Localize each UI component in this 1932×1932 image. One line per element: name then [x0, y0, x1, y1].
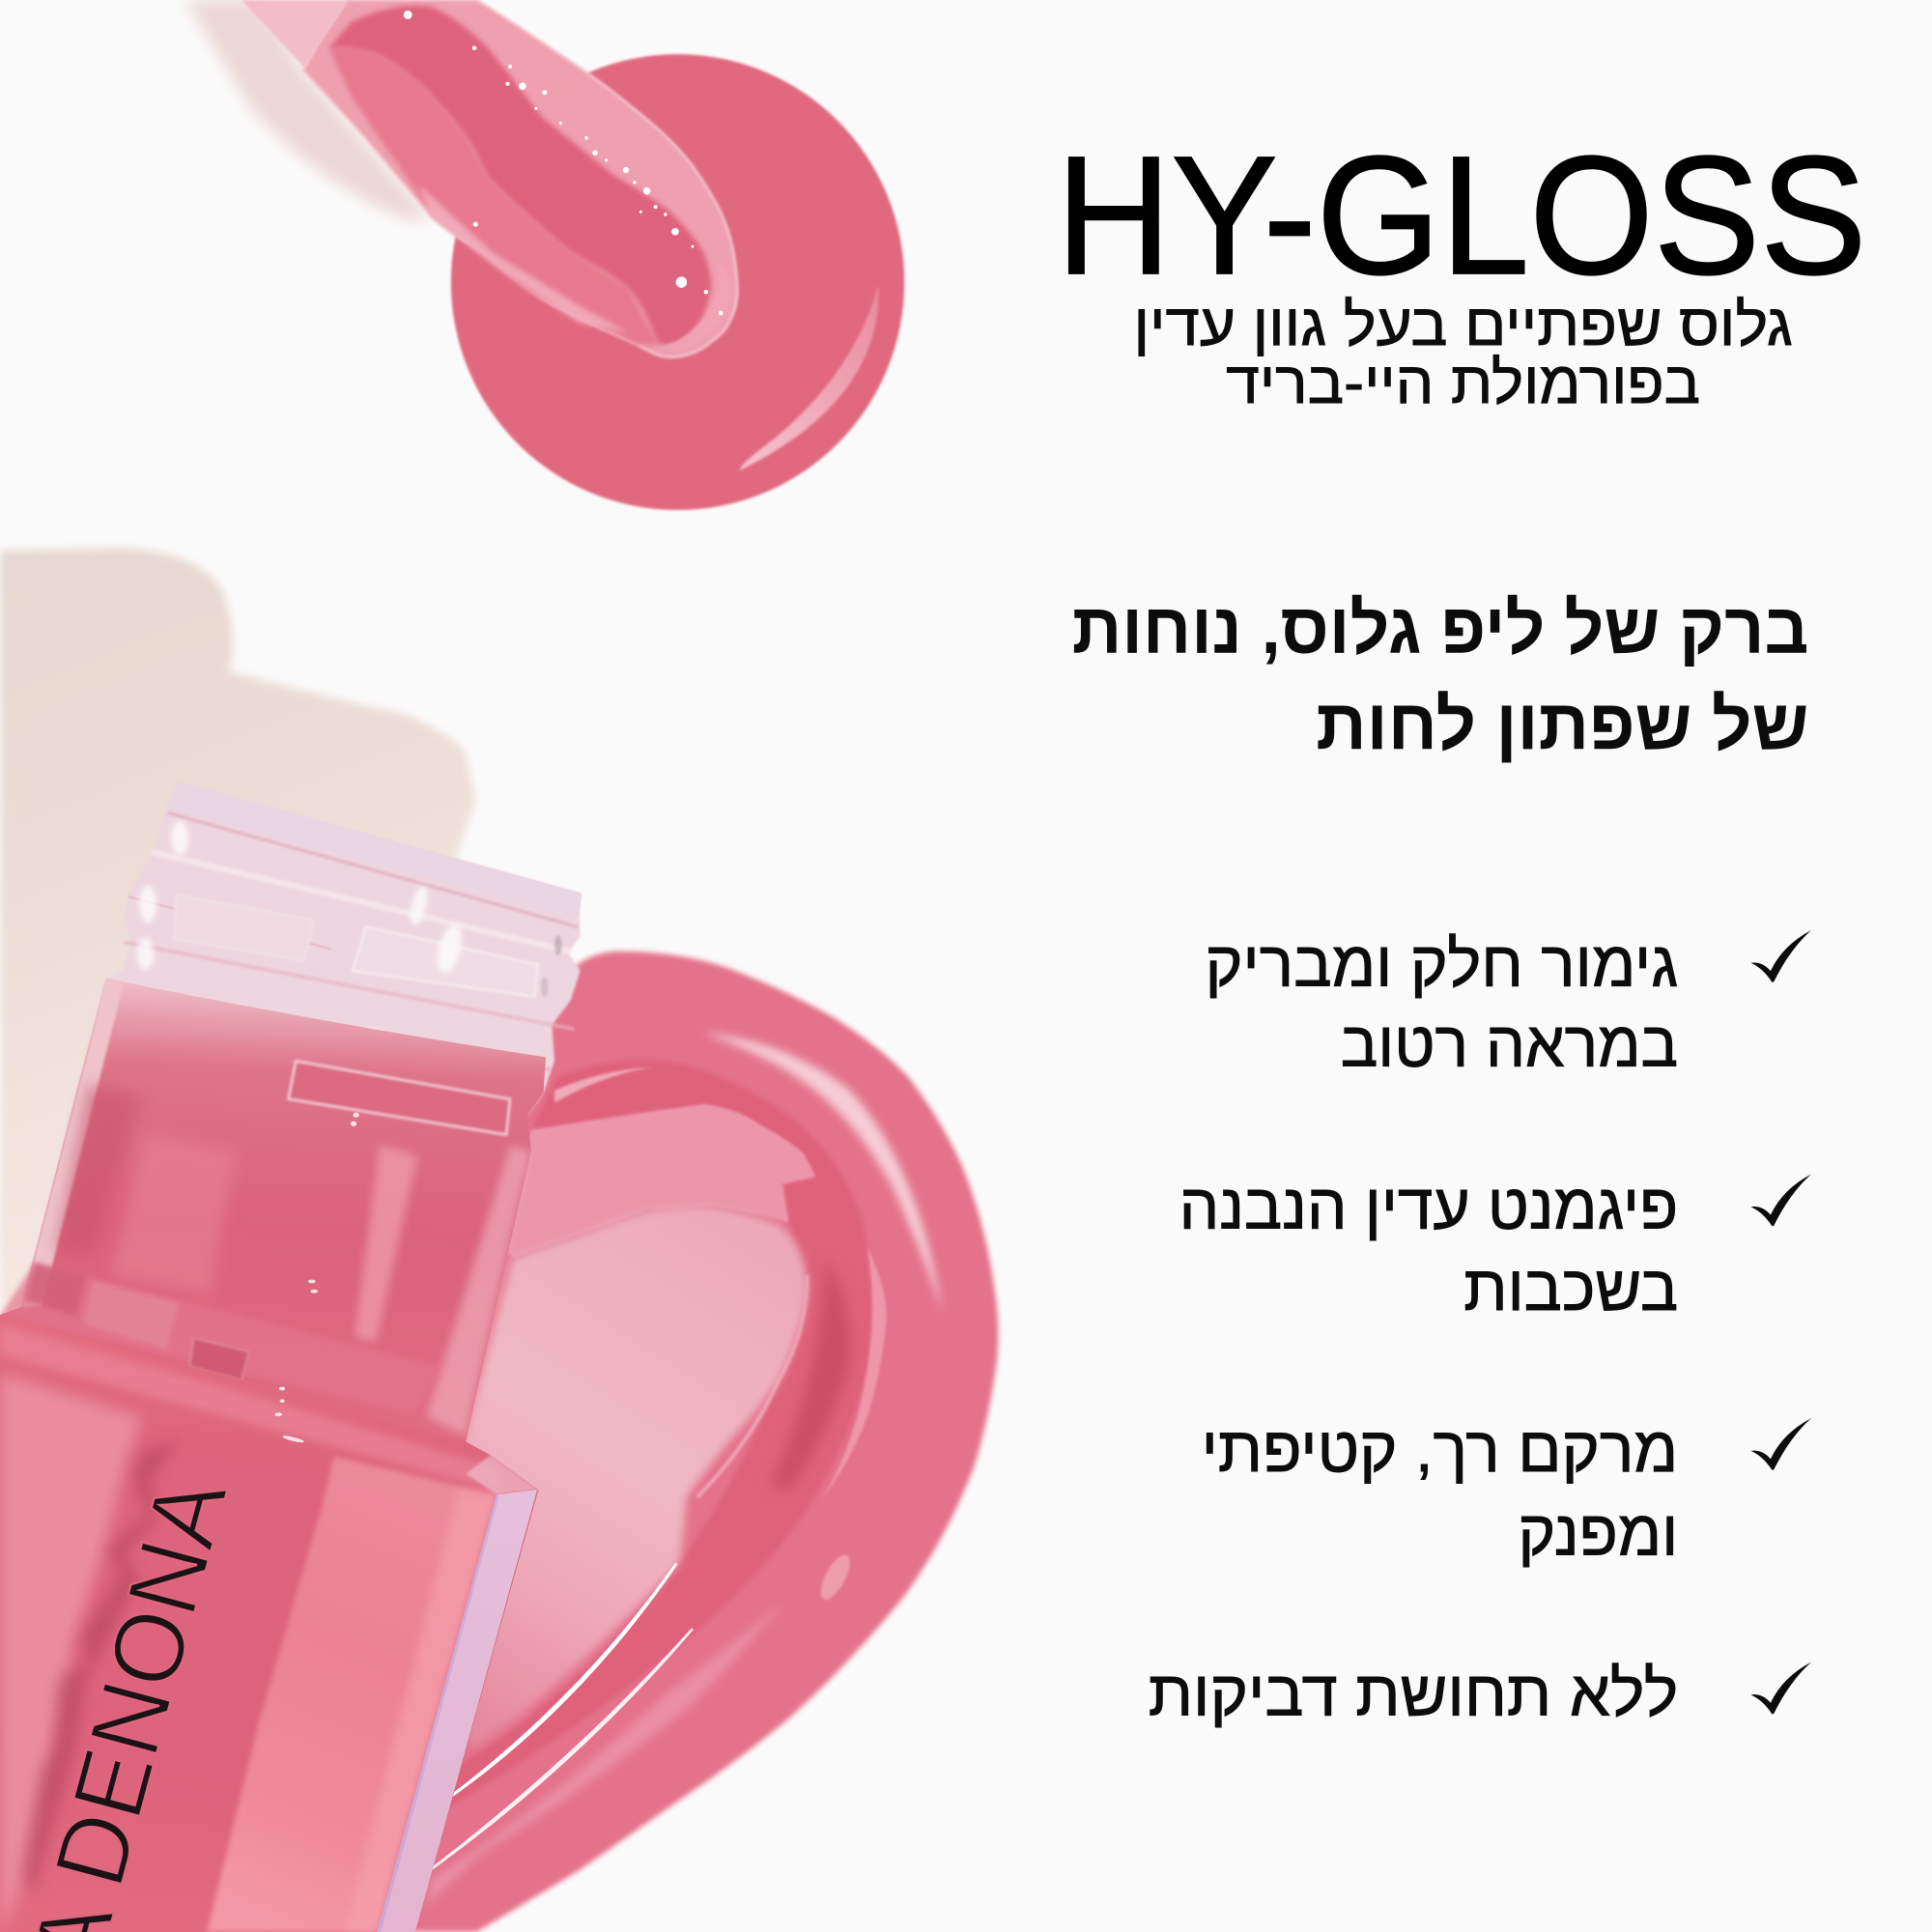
benefit text — [1179, 1172, 1678, 1324]
bottle shadow — [0, 549, 475, 1319]
body corner — [466, 1455, 538, 1494]
body top sheen — [0, 1324, 505, 1493]
speculars — [137, 820, 467, 1043]
applicator core — [329, 6, 711, 345]
benefit 3 — [1202, 1414, 1811, 1570]
bottle body — [0, 1315, 538, 1932]
swatch highlight — [739, 286, 879, 470]
inner edge line — [697, 1275, 807, 1497]
label reflection — [22, 1438, 182, 1891]
benefit 4 — [1149, 1659, 1811, 1730]
applicator stem — [242, 0, 357, 69]
applicator shadow — [185, 0, 431, 219]
small reflection — [815, 1550, 856, 1604]
outer band highlight — [702, 1033, 943, 1312]
dark inner band — [443, 1060, 872, 1811]
body light strip — [207, 1457, 497, 1932]
applicator lower lobe — [329, 47, 658, 346]
sparkles — [404, 11, 723, 315]
body left light — [0, 1374, 142, 1932]
mid pink layer — [493, 1104, 815, 1258]
neck right pale rim — [426, 1146, 531, 1435]
applicator lower frosted fringe — [419, 185, 629, 332]
applicator clear tip — [658, 261, 733, 350]
benefit text: פיגמנט עדין הנבנה — [1179, 1172, 1678, 1243]
upper thin rim — [554, 1067, 653, 1103]
neck mid light — [111, 1133, 237, 1293]
title: HY-GLOSS — [1056, 122, 1866, 310]
check icon — [1750, 1418, 1811, 1470]
clear cap neck — [106, 781, 582, 1115]
body glints — [274, 1113, 359, 1444]
collar window — [288, 1061, 510, 1135]
benefit 2 — [1179, 1172, 1811, 1324]
check icon — [1750, 1662, 1811, 1714]
applicator bristles — [303, 0, 737, 357]
inner strip — [345, 1491, 497, 1932]
subtitle: גלוס שפתיים בעל גוון עדין — [1133, 292, 1793, 357]
benefit text — [1205, 928, 1678, 1080]
main heading: ברק של ליפ גלוס, נוחות — [1072, 588, 1808, 668]
notch right — [353, 926, 538, 997]
benefit text: מרקם רך, קטיפתי — [1202, 1414, 1678, 1486]
neck notch — [189, 1338, 249, 1380]
main heading — [1072, 588, 1808, 765]
benefit text: במראה רטוב — [1341, 1009, 1678, 1080]
lavender edge — [377, 1490, 537, 1932]
main heading: של שפתון לחות — [1316, 685, 1808, 765]
round gloss swatch — [451, 54, 904, 510]
lip gloss applicator — [242, 0, 737, 357]
left translucent rim — [21, 979, 124, 1307]
check icon — [1750, 930, 1811, 982]
deepest shade — [770, 1257, 851, 1491]
benefit text — [1202, 1414, 1678, 1570]
lower band — [425, 1602, 783, 1907]
subtitle: בפורמולת היי-בריד — [1226, 350, 1700, 415]
neck light column — [355, 1145, 417, 1342]
white highlights — [447, 1564, 676, 1799]
benefit text: ומפנק — [1518, 1498, 1678, 1570]
benefit text: ללא תחושת דביקות — [1149, 1659, 1678, 1730]
check icon — [1750, 1175, 1811, 1226]
neck collar line — [0, 1263, 441, 1414]
gloss-filled neck — [0, 979, 546, 1455]
benefit 1 — [1205, 928, 1811, 1080]
pale centre — [419, 1206, 807, 1748]
heart gloss swatch — [246, 952, 998, 1932]
bottle — [0, 781, 582, 1932]
notch left — [174, 895, 314, 961]
subtitle — [1133, 292, 1793, 415]
light rim reflection — [823, 1247, 887, 1497]
benefit text: בשכבות — [1463, 1253, 1678, 1324]
benefit text: גימור חלק ומבריק — [1205, 928, 1678, 1000]
neck left dark — [55, 1084, 142, 1257]
thread bands — [126, 813, 577, 1069]
cap rim — [165, 781, 582, 917]
